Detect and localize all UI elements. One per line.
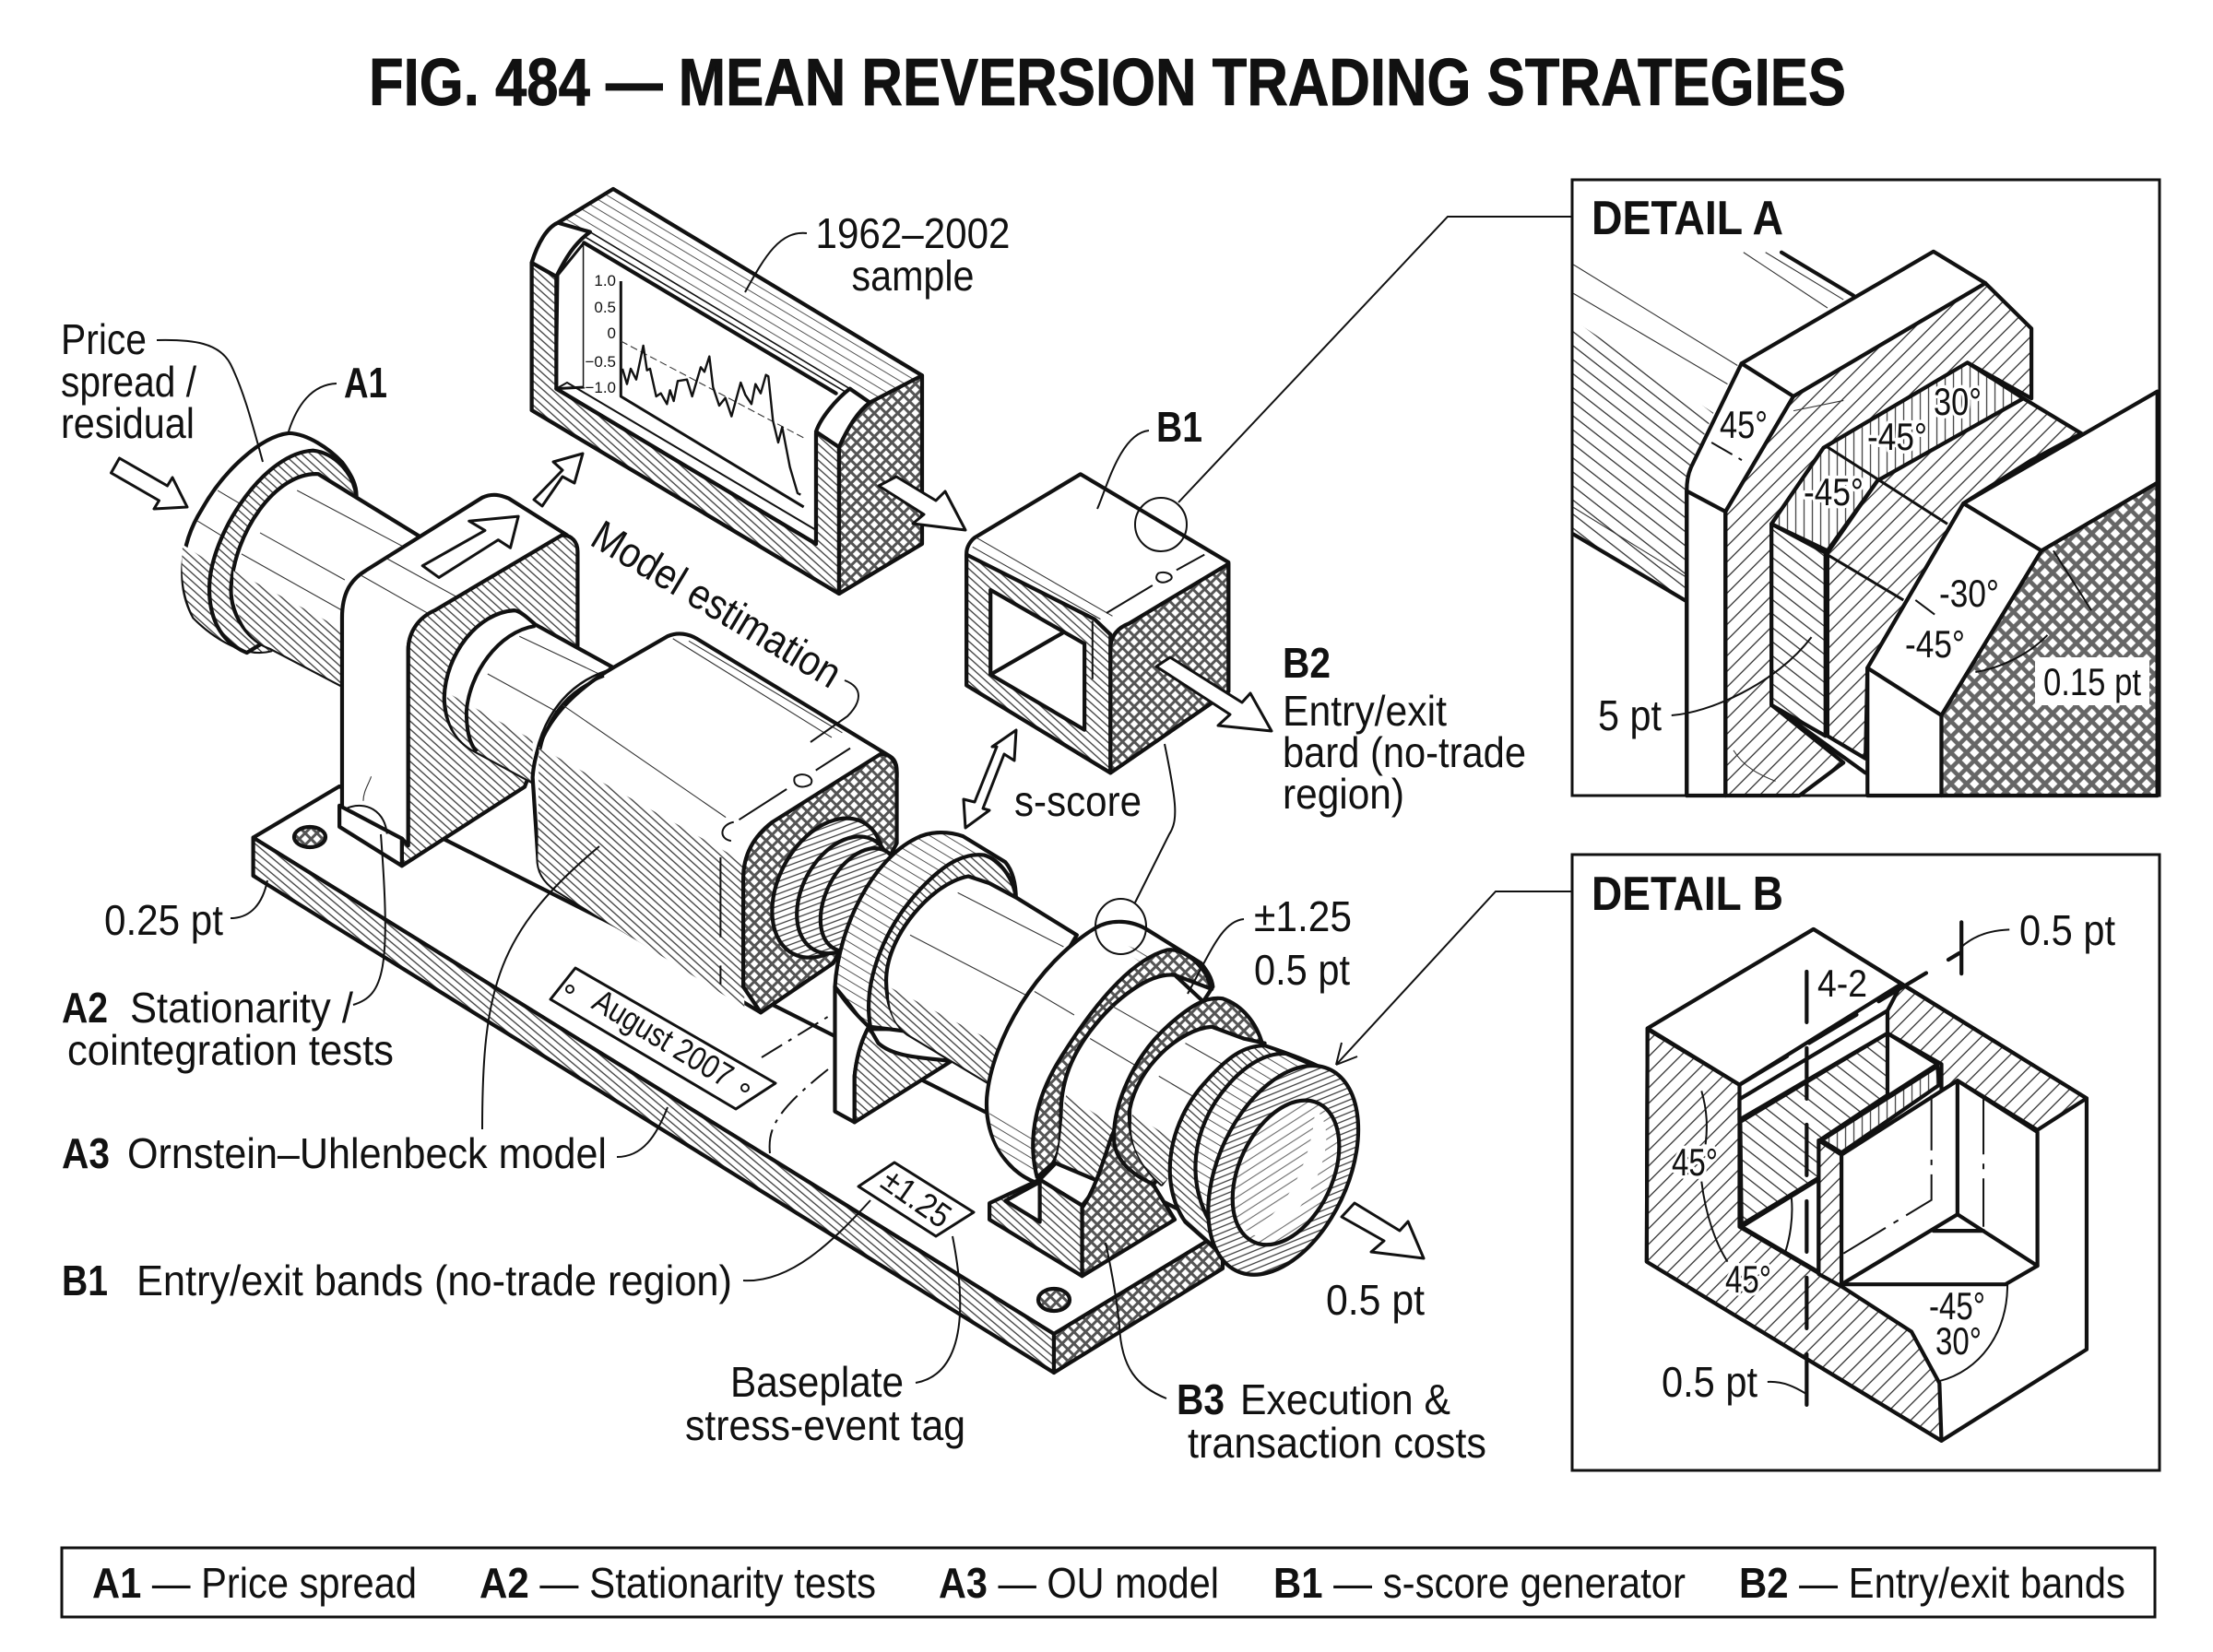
label: B2 entry/exit: region) [1283, 770, 1404, 818]
shaft section [231, 474, 434, 686]
label: B3: transaction costs [1188, 1419, 1486, 1467]
circle callout A on cube and leader to detail A [1135, 217, 1572, 551]
label: B2 entry/exit: Entry/exit [1283, 687, 1447, 735]
label: B2 entry/exit: B2 [1283, 639, 1331, 687]
label: model estimation: Model estimation [584, 511, 850, 697]
arrow: sample to cube [879, 477, 965, 530]
leader to detail B [1336, 891, 1572, 1065]
label: B2 entry/exit [1283, 639, 1526, 818]
bracket A2 [339, 495, 577, 866]
detail A annotations: -45° [1905, 622, 1965, 666]
connecting shaft [886, 877, 1077, 1083]
label: A1: A1 [344, 359, 387, 407]
label: B3 [1177, 1375, 1486, 1467]
label: sample period [815, 209, 1011, 300]
label: B3: B3 [1177, 1375, 1225, 1423]
panel: detail B [1572, 855, 2160, 1470]
label: output 0.5 pt: 0.5 pt [1326, 1276, 1425, 1324]
detail B annotations: 45° [1725, 1257, 1771, 1301]
circle callout B on bearing and leader from cube [1095, 744, 1175, 954]
detail B annotations [1662, 906, 2115, 1406]
chart axis labels: −0.5 [585, 353, 616, 371]
arrow: output [1342, 1203, 1424, 1258]
detail B heading: DETAIL B [1592, 867, 1783, 921]
arrow: s-score double [964, 730, 1016, 828]
chart axis labels: 0.5 [594, 299, 616, 316]
detail B annotations: 0.5 pt [1662, 1358, 1757, 1406]
label: price spread [61, 315, 196, 447]
legend item B1: B1 — s-score generator [1273, 1559, 1686, 1607]
label: A2 [62, 984, 394, 1074]
chart axis labels: 0 [608, 324, 616, 342]
label: s-score: s-score [1014, 777, 1142, 825]
detail B annotations: 4-2 [1817, 962, 1867, 1005]
detail A annotations: 30° [1934, 380, 1982, 423]
sample block with embedded chart [532, 189, 922, 594]
rear flange [834, 832, 1016, 1122]
leader lines [157, 233, 1244, 1398]
legend item B2: B2 — Entry/exit bands [1739, 1559, 2125, 1607]
detail A annotations: 0.15 pt [2043, 660, 2141, 703]
second ring and shaft [1114, 998, 1265, 1185]
output sleeve [1170, 1045, 1388, 1292]
detail B drawing [1647, 922, 2087, 1441]
detail A annotations: -45° [1867, 415, 1927, 458]
cube B1: s-score generator [966, 474, 1228, 773]
label: price spread: spread / [61, 358, 196, 406]
label: B1: B1 [1156, 403, 1202, 451]
intermediate shaft [444, 610, 612, 782]
label: price spread: residual [61, 399, 195, 447]
block end collars [751, 804, 915, 973]
tag: ±1.25: ±1.25 [875, 1161, 958, 1235]
detail B annotations: 0.5 pt [2019, 906, 2115, 954]
detail A heading: DETAIL A [1592, 192, 1783, 245]
chart axis labels [585, 272, 616, 396]
label: A3: Ornstein–Uhlenbeck model [127, 1129, 607, 1177]
label: price spread: Price [61, 315, 147, 363]
label: B1 entry/exit bands: B1 [62, 1257, 108, 1304]
detail B annotations: 30° [1935, 1319, 1982, 1363]
large bearing B3 [987, 922, 1227, 1276]
label: baseplate: Baseplate [730, 1358, 904, 1406]
tag: August 2007: August 2007 [586, 982, 740, 1094]
detail A drawing [1574, 252, 2158, 796]
block body [532, 189, 922, 594]
legend item A1: A1 — Price spread [92, 1559, 417, 1607]
arrow: input [111, 458, 187, 509]
detail B annotations: 45° [1672, 1140, 1718, 1184]
arrow: cube to band [1156, 657, 1272, 731]
legend item A3: A3 — OU model [939, 1559, 1219, 1607]
left assembly: input flange, shaft and bracket [182, 433, 915, 1012]
chart axis labels: 1.0 [594, 272, 616, 289]
label: B3: Execution & [1240, 1375, 1450, 1423]
detail A annotations: 45° [1720, 403, 1768, 446]
detail A annotations [1598, 380, 2149, 739]
right assembly: output bearings and sleeve [834, 832, 1388, 1292]
detail A annotations: -30° [1939, 572, 1999, 615]
label: B1 entry/exit bands: Entry/exit bands (no-trade region) [136, 1257, 732, 1304]
label: baseplate [685, 1358, 965, 1449]
model block A3 [533, 633, 897, 1012]
detail A annotations: 5 pt [1598, 691, 1662, 739]
label: ±1.25 0.5 pt [1254, 892, 1352, 994]
label: A2: A2 [62, 984, 108, 1032]
detail A frame [1572, 180, 2160, 796]
detail B annotations: -45° [1929, 1284, 1985, 1328]
label: sample period: 1962–2002 [815, 209, 1011, 257]
label: 0.25 pt: 0.25 pt [104, 896, 223, 944]
label: A2: Stationarity / [130, 984, 353, 1032]
label: B2 entry/exit: bard (no-trade [1283, 728, 1526, 776]
panel: detail A [1572, 180, 2160, 796]
chart: residual series [621, 281, 804, 507]
flange A1 [182, 433, 356, 653]
label: ±1.25 0.5 pt: 0.5 pt [1254, 946, 1350, 994]
title: FIG. 484 — MEAN REVERSION TRADING STRATEGIES [369, 46, 1846, 120]
legend item A2: A2 — Stationarity tests [479, 1559, 876, 1607]
legend bar [62, 1548, 2155, 1617]
label: sample period: sample [852, 252, 974, 300]
baseplate [254, 786, 1223, 1373]
label: ±1.25 0.5 pt: ±1.25 [1254, 892, 1352, 940]
label: baseplate: stress-event tag [685, 1401, 965, 1449]
detail B frame [1572, 855, 2160, 1470]
arrow: to sample block [534, 454, 583, 506]
detail A annotations: -45° [1804, 470, 1864, 513]
arrow on bracket [422, 516, 518, 577]
label: A2: cointegration tests [67, 1026, 394, 1074]
label: A3: A3 [62, 1129, 110, 1177]
chart axis labels: −1.0 [585, 379, 616, 396]
